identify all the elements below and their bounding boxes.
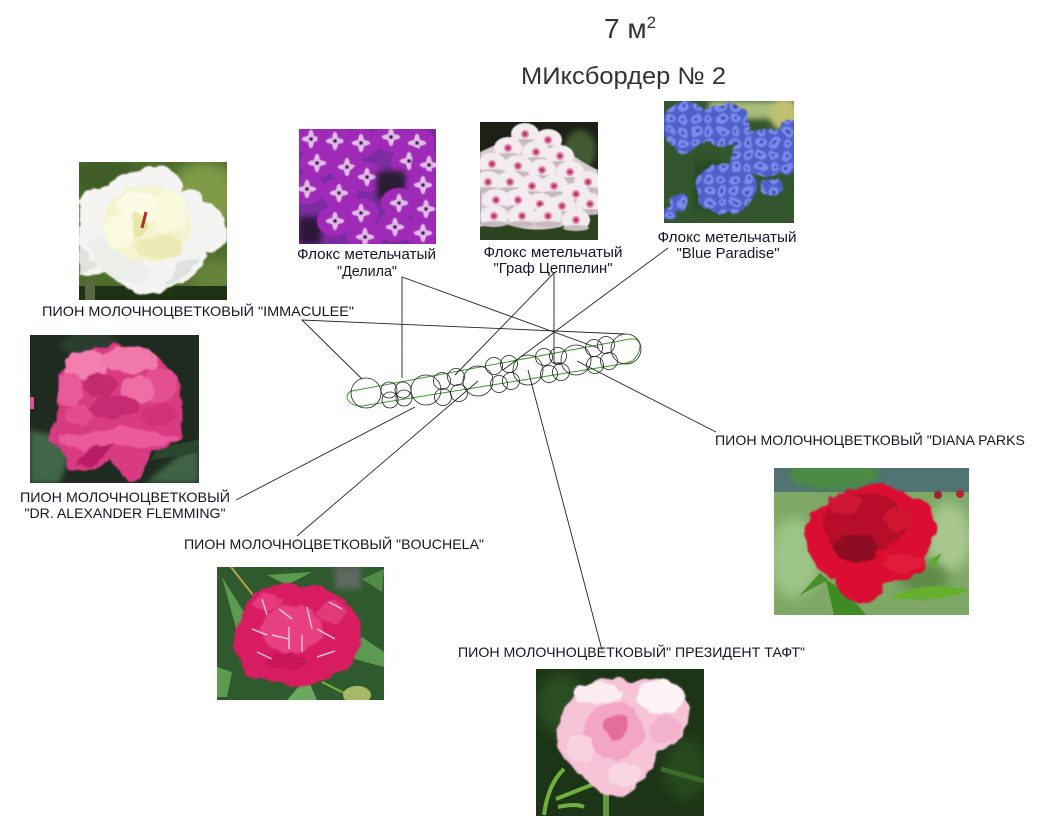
photo: peony Bouchela <box>217 567 384 704</box>
label: Graf Zeppelin <box>484 245 622 277</box>
photo: phlox Graf Zeppelin <box>474 122 604 240</box>
label: Bouchela: ПИОН МОЛОЧНОЦВЕТКОВЫЙ "BOUCHELA" <box>184 535 484 552</box>
leader lines <box>236 248 716 650</box>
label: Delila: Флокс метельчатый <box>297 247 436 263</box>
photo: peony Dr. Alexander Flemming <box>30 333 199 483</box>
photo: peony Diana Parks <box>774 468 969 615</box>
planting plan: border outline <box>347 339 640 406</box>
photo: phlox Delila <box>299 129 436 244</box>
label: Delila <box>297 247 436 280</box>
label: Blue Paradise: "Blue Paradise" <box>676 246 780 262</box>
label: Dr. Alexander Flemming <box>20 488 230 521</box>
heading: mixborder name: МИксбордер № 2 <box>521 63 726 90</box>
label: Diana Parks: ПИОН МОЛОЧНОЦВЕТКОВЫЙ "DIANA PARKS <box>715 431 1025 448</box>
label: Graf Zeppelin: Флокс метельчатый <box>484 245 622 261</box>
label: Delila: "Делила" <box>337 264 397 280</box>
label: Blue Paradise: Флокс метельчатый <box>658 230 796 246</box>
planting plan: plant circles <box>351 334 641 408</box>
label: Dr. Alexander Flemming: "DR. ALEXANDER FLEMMING" <box>24 505 226 521</box>
label: Graf Zeppelin: "Граф Цеппелин" <box>494 261 612 277</box>
title: area: 2 <box>647 13 656 32</box>
label: Immaculee: ПИОН МОЛОЧНОЦВЕТКОВЫЙ "IMMACULEE" <box>42 302 354 319</box>
label: Dr. Alexander Flemming: ПИОН МОЛОЧНОЦВЕТКОВЫЙ <box>20 488 230 505</box>
title: area: 7 м <box>604 13 647 44</box>
label: Blue Paradise <box>658 230 796 262</box>
photo: peony President Taft <box>536 669 708 816</box>
label: President Taft: ПИОН МОЛОЧНОЦВЕТКОВЫЙ" ПРЕЗИДЕНТ ТАФТ" <box>458 643 805 660</box>
photo: phlox Blue Paradise <box>661 99 801 223</box>
photo: peony Immaculee <box>79 162 227 300</box>
